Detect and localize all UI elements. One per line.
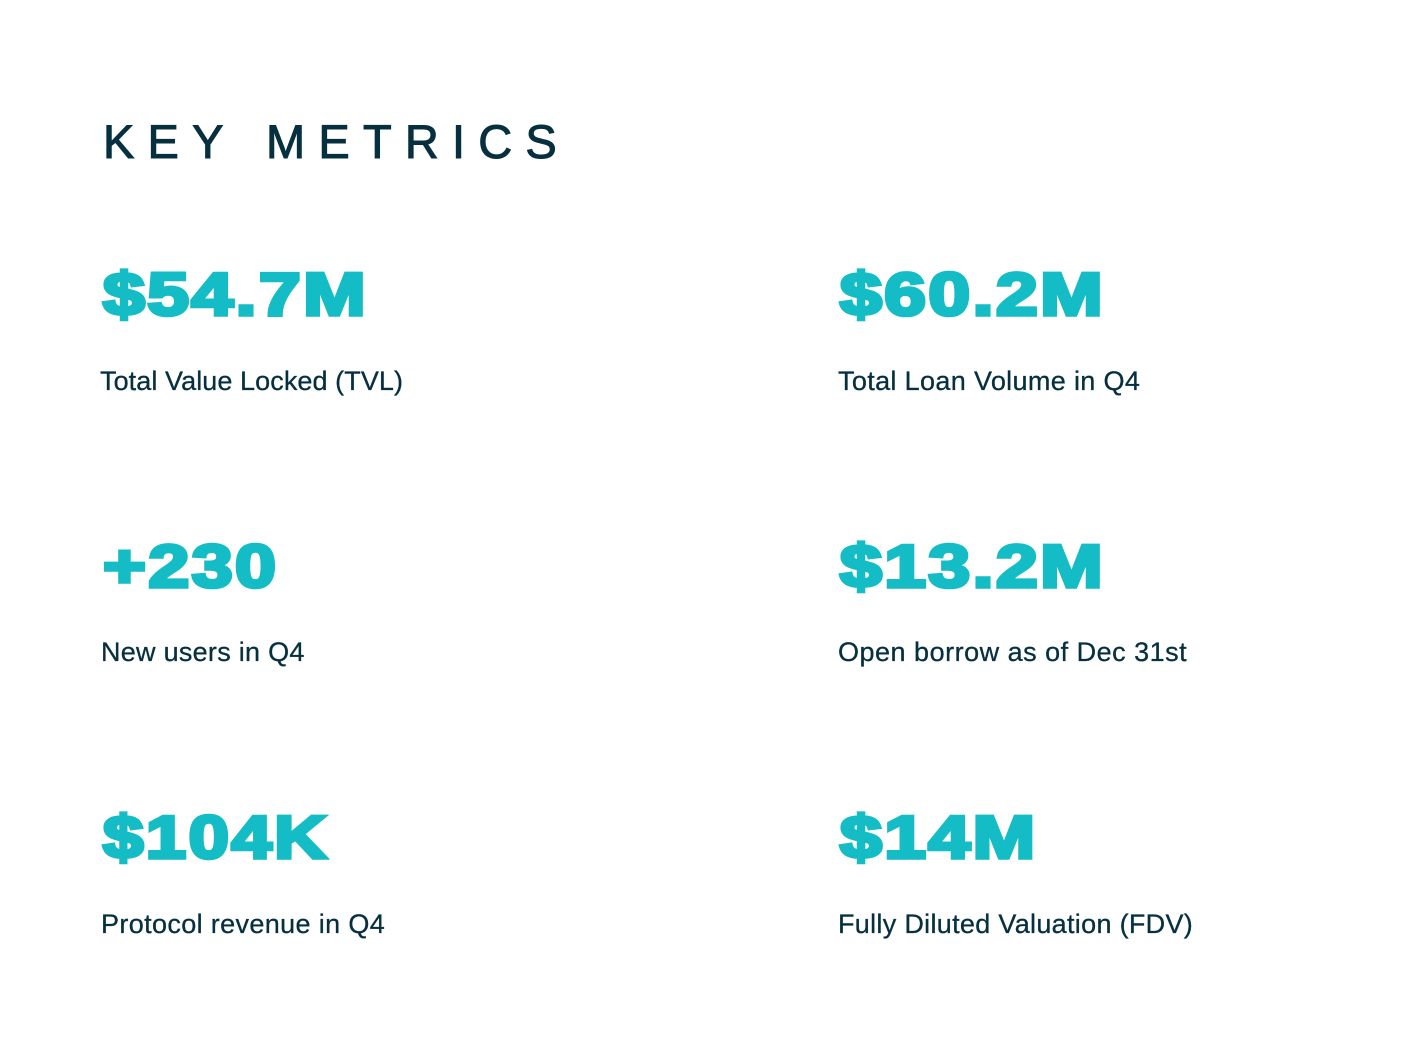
label: Open borrow as of Dec 31st: [838, 637, 1187, 667]
metric: total loan volume: [838, 261, 1140, 396]
metric: new users: [101, 533, 305, 667]
metric: fully diluted valuation: [838, 804, 1193, 939]
value: $60.2M: [840, 261, 1105, 328]
metric: total value locked: [100, 261, 403, 396]
metric: protocol revenue: [101, 804, 385, 939]
label: Fully Diluted Valuation (FDV): [838, 909, 1193, 939]
label: Total Value Locked (TVL): [100, 366, 403, 396]
value: +230: [103, 533, 278, 600]
value: $13.2M: [840, 533, 1105, 600]
label: Protocol revenue in Q4: [101, 909, 385, 939]
label: Total Loan Volume in Q4: [838, 366, 1140, 396]
title: KEY METRICS: [103, 115, 570, 168]
metric: open borrow: [838, 533, 1187, 667]
value: $54.7M: [103, 261, 368, 328]
value: $104K: [103, 804, 329, 871]
label: New users in Q4: [101, 637, 305, 667]
value: $14M: [840, 804, 1038, 871]
